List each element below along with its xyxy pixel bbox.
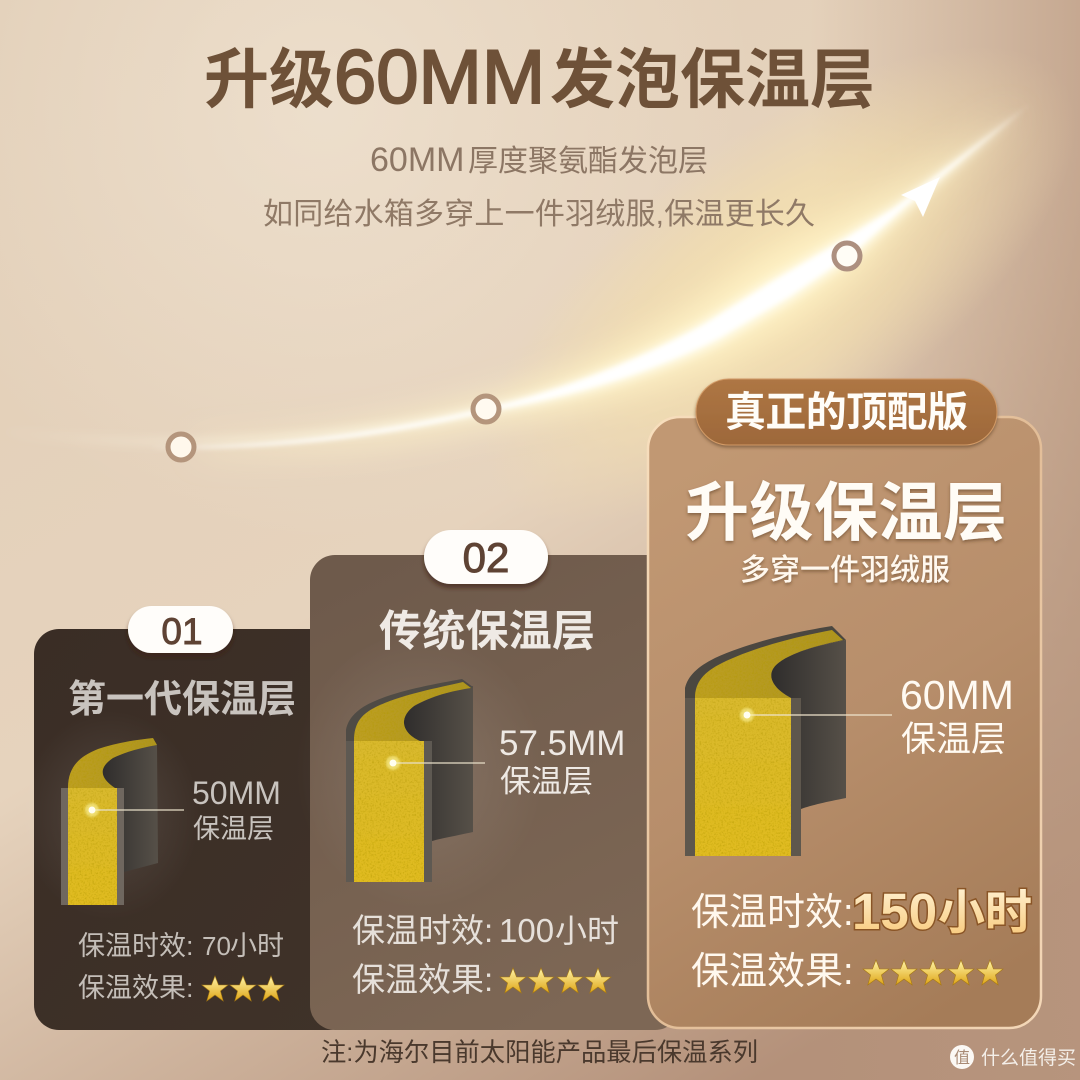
stars: 5 [863, 960, 1003, 985]
watermark: 什么值得买 [981, 1047, 1076, 1069]
duration: 100 [499, 912, 554, 949]
curve node 2 [473, 396, 499, 422]
duration value: 150 hours: 小时 [938, 886, 1032, 939]
callout dot and line [386, 756, 485, 770]
badge: 02 [424, 530, 548, 584]
panel: first generation [20, 606, 354, 1030]
badge: top configuration: 真正的顶配版 [725, 389, 968, 435]
duration: 70 [202, 931, 231, 961]
panel: traditional [295, 530, 680, 1030]
badge: 01 [128, 606, 233, 653]
curve node 1 [168, 434, 194, 460]
subtitle line 1: 60MM [370, 141, 464, 179]
icon: arrow head [901, 177, 940, 217]
duration: 保温时效: [78, 931, 194, 961]
heading: upgraded layer: 升级保温层 [685, 477, 1007, 549]
stars: 3 [202, 976, 284, 1001]
label: layer: 保温层 [193, 814, 274, 844]
rating label: 保温效果: [78, 973, 194, 1003]
diagram: 50mm layer [61, 738, 184, 905]
duration: 小时 [555, 913, 619, 949]
rating label: 保温效果: [691, 951, 854, 993]
panel: upgraded [648, 379, 1041, 1028]
title: 升级 [204, 43, 334, 116]
heading: traditional: 传统保温层 [379, 608, 595, 656]
badge: 02: 02 [463, 534, 509, 581]
callout dot and line [85, 803, 184, 817]
watermark: 值 [954, 1049, 970, 1067]
heading: first generation: 第一代保温层 [68, 679, 296, 721]
subtitle line 2: 如同给水箱多穿上一件羽绒服,保温更长久 [263, 198, 815, 231]
stars: 4 [500, 968, 611, 993]
diagram: 57.5mm layer [346, 679, 485, 882]
subheading: 多穿一件羽绒服 [740, 554, 950, 587]
rating label: 保温效果: [352, 961, 493, 998]
label: 60MM: 60MM [900, 672, 1014, 718]
callout dot and line [740, 708, 892, 722]
watermark [950, 1045, 1076, 1069]
duration value: 150 hours: 150 [852, 883, 937, 940]
label: layer: 保温层 [901, 720, 1006, 759]
badge: top configuration [696, 379, 997, 445]
diagram: 60mm layer [685, 626, 892, 856]
label: 57.5MM: 57.5MM [499, 724, 625, 763]
curve node 3 [834, 243, 860, 269]
duration label: 保温时效: [691, 892, 854, 934]
duration: 小时 [230, 931, 284, 961]
title: 60MM [334, 35, 545, 120]
badge: 01: 01 [161, 611, 203, 652]
label: layer: 保温层 [500, 764, 593, 799]
footnote: 注:为海尔目前太阳能产品最后保温系列 [321, 1039, 758, 1067]
title: 发泡保温层 [550, 43, 875, 116]
duration: 保温时效: [352, 912, 493, 949]
label: 50MM: 50MM [192, 775, 281, 811]
glowing rising curve [0, 0, 1080, 612]
subtitle line 1: 厚度聚氨酯发泡层 [468, 145, 708, 178]
